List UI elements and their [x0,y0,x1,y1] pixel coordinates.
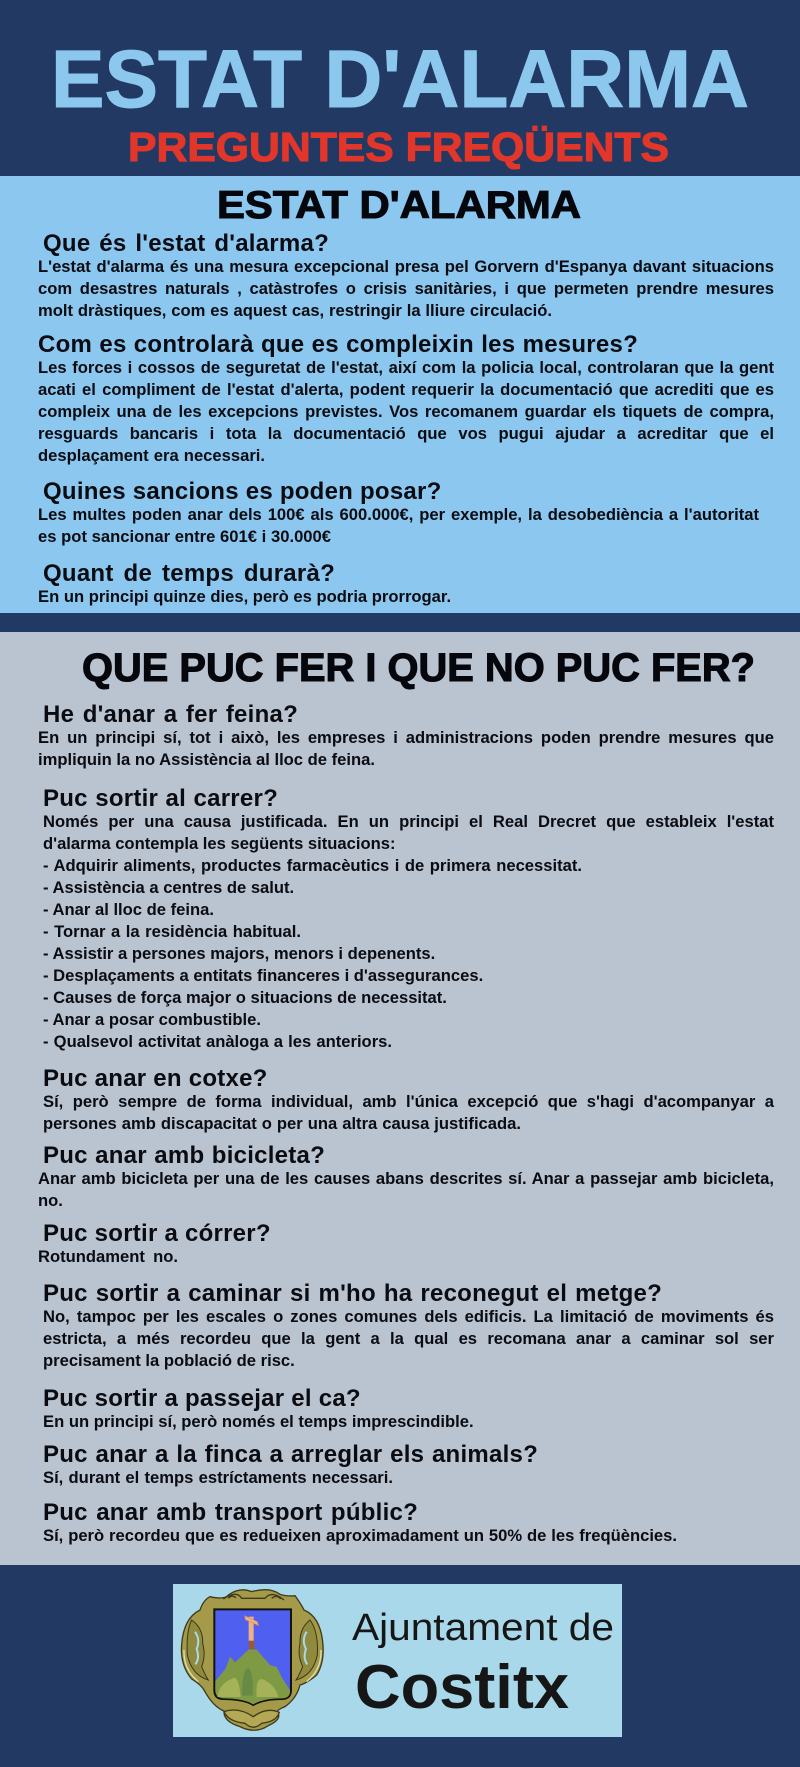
answer text: Les multes poden anar dels 100€ als 600.000€, per exemple, la desobediència a l'autoritat [38,505,759,524]
question heading: Puc sortir a córrer? [43,1220,271,1247]
panel: que puc fer [0,632,800,1565]
answer text: - Assistència a centres de salut. [43,878,294,897]
question: puc sortir al carrer [43,785,774,1051]
answer text: No, tampoc per les escales o zones comunes dels edificis. La limitació de moviments és [43,1307,774,1326]
answer text [38,257,774,320]
question heading: Puc anar amb bicicleta? [43,1142,325,1169]
question: que és l'estat d'alarma [38,230,774,320]
cross [249,1640,254,1649]
answer text: Sí, però recordeu que es redueixen aproximadament un 50% de les freqüències. [43,1526,677,1545]
logo text: Ajuntament de: Ajuntament de [352,1607,614,1649]
answer text: impliquin la no Assistència al lloc de feina. [38,750,375,769]
side ornaments [187,1620,208,1680]
answer text: d'alarma contempla les següents situacions: [43,834,396,853]
answer text: - Assistir a persones majors, menors i depenents. [43,944,435,963]
question: puc sortir a passejar el ca [43,1385,474,1431]
answer text: - Tornar a la residència habitual. [43,922,301,941]
question: com es controlarà [38,331,774,465]
answer text: Anar amb bicicleta per una de les causes abans descrites sí. Anar a passejar amb bicicleta, [38,1169,774,1188]
answer text [43,812,774,1051]
answer text: acati el compliment de l'estat d'alerta, podent requerir la documentació que acrediti que es [38,380,774,399]
answer text: es pot sancionar entre 601€ i 30.000€ [38,527,331,546]
crest outer frame [181,1590,323,1730]
question heading: Com es controlarà que es compleixin les mesures? [38,331,638,358]
question heading: Que és l'estat d'alarma? [43,230,329,257]
header banner [0,0,800,176]
answer text [38,505,759,546]
panel: estat d'alarma [0,176,800,613]
question: puc anar amb transport públic [43,1499,677,1545]
question: puc sortir a córrer [38,1220,271,1266]
top and bottom scrolls [223,1594,284,1600]
answer text: no. [38,1191,63,1210]
answer text: - Desplaçaments a entitats financeres i d'assegurances. [43,966,483,985]
icon: coat of arms [181,1590,323,1730]
section heading: ESTAT D'ALARMA [217,184,581,226]
main title: ESTAT D'ALARMA [51,34,749,125]
question heading: Puc anar a la finca a arreglar els animals? [43,1441,538,1468]
question heading: Puc sortir a caminar si m'ho ha reconegut el metge? [43,1280,662,1307]
logo text: Costitx: Costitx [355,1653,570,1722]
subtitle: PREGUNTES FREQÜENTS [128,124,669,170]
answer text: estricta, a més recordeu que la gent a la qual es recomana anar a caminar sol ser [43,1329,774,1348]
section heading: QUE PUC FER I QUE NO PUC FER? [82,646,755,690]
question: puc anar amb bicicleta [38,1142,774,1210]
logo card: Ajuntament de Costitx [173,1584,622,1737]
answer text: Només per una causa justificada. En un principi el Real Drecret que estableix l'estat [43,812,774,831]
answer text: com desastres naturals , catàstrofes o crisis sanitàries, i que permeten prendre mesures [38,279,774,298]
answer text [38,1169,774,1210]
answer text [38,728,774,769]
answer text: En un principi sí, però només el temps imprescindible. [43,1412,474,1431]
answer text: En un principi sí, tot i això, les empreses i administracions poden prendre mesures que [38,728,774,747]
question: puc anar a la finca [43,1441,538,1487]
question heading: Puc anar amb transport públic? [43,1499,418,1526]
answer text [43,1092,774,1133]
blue shield [214,1609,291,1705]
answer text: Les forces i cossos de seguretat de l'estat, així com la policia local, controlaran que la gent [38,358,774,377]
question heading: Puc anar en cotxe? [43,1065,268,1092]
question heading: Quines sancions es poden posar? [43,478,442,505]
answer text: Sí, però sempre de forma individual, amb l'única excepció que s'hagi d'acompanyar a [43,1092,774,1111]
answer text: Sí, durant el temps estríctaments necessari. [43,1468,393,1487]
answer text: compleix una de les excepcions previstes. Vos recomanem guardar els tiquets de compra, [38,402,774,421]
question: quines sancions [38,478,759,546]
answer text: desplaçament era necessari. [38,446,265,465]
question: puc anar en cotxe [43,1065,774,1133]
question: quant de temps [38,560,451,606]
answer text: resguards bancaris i tota la documentació que vos pugui ajudar a acreditar que el [38,424,774,443]
answer text: Rotundament no. [38,1247,178,1266]
answer text: - Anar al lloc de feina. [43,900,214,919]
question heading: He d'anar a fer feina? [43,701,298,728]
answer text: precisament la població de risc. [43,1351,295,1370]
answer text: - Causes de força major o situacions de necessitat. [43,988,447,1007]
answer text: - Adquirir aliments, productes farmacèutics i de primera necessitat. [43,856,582,875]
answer text [38,358,774,465]
answer text [43,1307,774,1370]
answer text: - Qualsevol activitat anàloga a les anteriors. [43,1032,392,1051]
question heading: Quant de temps durarà? [43,560,335,587]
question heading: Puc sortir a passejar el ca? [43,1385,361,1412]
mountain [215,1649,290,1704]
answer text: persones amb discapacitat o per una altra causa justificada. [43,1114,521,1133]
answer text: - Anar a posar combustible. [43,1010,261,1029]
question: he d'anar a fer feina [38,701,774,769]
question heading: Puc sortir al carrer? [43,785,278,812]
answer text: En un principi quinze dies, però es podria prorrogar. [38,587,451,606]
answer text: L'estat d'alarma és una mesura excepcional presa pel Gorvern d'Espanya davant situacions [38,257,774,276]
question: puc sortir a caminar [43,1280,774,1370]
answer text: molt dràstiques, com es aquest cas, restringir la lliure circulació. [38,301,552,320]
